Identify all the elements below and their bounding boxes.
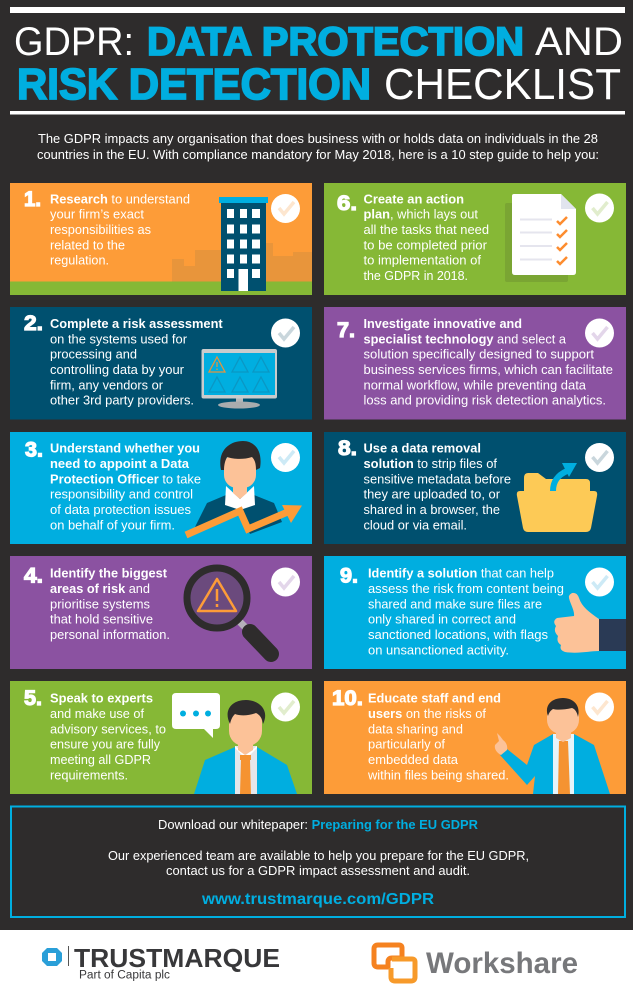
- icon: monitor with warnings: [202, 349, 277, 408]
- number: 1.: [24, 188, 41, 211]
- step text: only shared in correct and: [368, 612, 516, 627]
- icon: check: [271, 443, 300, 472]
- step text: cloud or via email.: [364, 517, 467, 532]
- panel: step 4 biggest risk: [10, 556, 312, 669]
- panel: step 8 data removal: [324, 432, 626, 544]
- step text: [50, 441, 201, 532]
- step text: particularly of: [368, 737, 445, 752]
- step text: on behalf of your firm.: [50, 517, 175, 532]
- step text: sensitive metadata before: [364, 471, 511, 486]
- illustration: city skyline: [172, 243, 312, 282]
- illustration: presenter: [495, 698, 610, 794]
- step text: of data protection issues: [50, 502, 191, 517]
- step text: embedded data: [368, 752, 459, 767]
- step text: firm, any vendors or: [50, 377, 164, 392]
- icon: checklist document: [505, 194, 576, 282]
- illustration: officer with arrow: [186, 441, 302, 535]
- title: CHECKLIST: [384, 60, 621, 109]
- step text: ensure you are fully: [50, 737, 160, 752]
- number: 8.: [338, 437, 357, 460]
- title: RISK DETECTION: [17, 60, 371, 109]
- logo: Workshare: Workshare: [426, 947, 578, 980]
- step text: [368, 566, 564, 657]
- step text: meeting all GDPR: [50, 752, 151, 767]
- step text: specialist technology and select a: [364, 331, 567, 346]
- step text: Use a data removal: [364, 441, 481, 456]
- step text: [50, 691, 166, 782]
- step text: [364, 316, 613, 408]
- step text: requirements.: [50, 767, 128, 782]
- intro text: [37, 131, 599, 162]
- panel: step 3 data protection officer: [10, 432, 312, 544]
- number: 7.: [337, 319, 355, 342]
- icon: check: [271, 318, 300, 348]
- step text: other 3rd party providers.: [50, 393, 194, 408]
- team text: Our experienced team are available to help you prepare for the EU GDPR,: [108, 848, 529, 863]
- illustration: expert: [194, 700, 297, 794]
- title: DATA PROTECTION: [147, 20, 524, 64]
- title: [14, 20, 623, 109]
- step text: users on the risks of: [368, 706, 486, 721]
- step text: responsibilities as: [50, 222, 151, 237]
- step text: [50, 566, 170, 642]
- number: 2.: [24, 312, 43, 335]
- step text: need to appoint a Data: [50, 456, 190, 471]
- step text: [367, 691, 509, 782]
- step text: on the systems used for: [50, 331, 188, 346]
- logo: Trustmarque: [42, 943, 280, 982]
- step text: to implementation of: [364, 253, 481, 268]
- panel: step 5 speak to experts: [10, 681, 312, 794]
- step text: shared in a browser, the: [364, 502, 500, 517]
- step text: shared and make sure files are: [368, 596, 542, 611]
- step text: prioritise systems: [50, 596, 150, 611]
- step text: solution specifically designed to support: [364, 347, 594, 362]
- step text: Protection Officer to take: [50, 471, 201, 486]
- step text: the GDPR in 2018.: [364, 268, 468, 283]
- step text: Identify the biggest: [50, 566, 168, 581]
- step text: Educate staff and end: [368, 691, 501, 706]
- step text: [364, 441, 511, 532]
- panel: step 10 educate staff: [324, 681, 626, 794]
- logo: Trustmarque: TRUSTMARQUE: [74, 943, 280, 973]
- title: GDPR:: [14, 20, 134, 64]
- step text: your firm’s exact: [50, 207, 144, 222]
- panel: step 9 identify a solution: [324, 556, 626, 669]
- callout: whitepaper download: [11, 806, 625, 917]
- panel: step 6 action plan: [324, 183, 626, 295]
- step text: within files being shared.: [367, 767, 509, 782]
- intro text: countries in the EU. With compliance mandatory for May 2018, here is a 10 step guide to help you:: [37, 147, 599, 162]
- icon: folder with arrow: [517, 463, 597, 532]
- number: 9.: [340, 565, 358, 588]
- step text: Research to understand: [50, 191, 190, 206]
- step text: that hold sensitive: [50, 612, 153, 627]
- step text: Understand whether you: [50, 441, 200, 456]
- number: 3.: [25, 439, 43, 462]
- panel: step 7 innovative technology: [324, 307, 626, 420]
- step text: controlling data by your: [50, 362, 185, 377]
- icon: check: [585, 692, 614, 722]
- team text: contact us for a GDPR impact assessment and audit.: [166, 863, 470, 878]
- step text: [364, 191, 489, 283]
- icon: building: [219, 197, 268, 291]
- step text: regulation.: [50, 253, 109, 268]
- step text: [50, 316, 223, 408]
- download line: Download our whitepaper: Preparing for the EU GDPR: [158, 817, 479, 832]
- step text: solution to strip files of: [364, 456, 497, 471]
- step text: sanctioned locations, with flags: [368, 627, 548, 642]
- step text: [50, 191, 190, 268]
- step text: data sharing and: [368, 721, 463, 736]
- step text: areas of risk and: [50, 581, 150, 596]
- step text: all the tasks that need: [364, 222, 489, 237]
- number: 10.: [332, 687, 363, 710]
- icon: speech bubble: [172, 693, 220, 738]
- logo: Workshare: [374, 945, 578, 981]
- icon: thumbs up: [554, 593, 626, 653]
- number: 4.: [24, 565, 43, 588]
- step text: they are uploaded to, or: [364, 487, 501, 502]
- panel: step 2 risk assessment: [10, 307, 312, 420]
- icon: check: [271, 194, 300, 223]
- icon: check: [585, 568, 614, 596]
- step text: on unsanctioned activity.: [368, 642, 509, 657]
- icon: check: [271, 692, 300, 722]
- step text: business services firms, which can facilitate: [364, 362, 613, 377]
- panel: step 1 research: [10, 183, 312, 295]
- step text: advisory services, to: [50, 721, 166, 736]
- icon: check: [585, 194, 614, 222]
- step text: and make use of: [50, 706, 144, 721]
- footer: logos: [0, 930, 633, 989]
- step text: personal information.: [50, 627, 170, 642]
- number: 6.: [337, 192, 357, 215]
- website url: www.trustmarque.com/GDPR: [201, 891, 434, 908]
- icon: check: [271, 568, 300, 596]
- logo: Trustmarque: Part of Capita plc: [79, 970, 170, 982]
- number: 5.: [24, 687, 42, 710]
- step text: Complete a risk assessment: [50, 316, 223, 331]
- step text: loss and providing risk detection analytics.: [364, 393, 606, 408]
- intro text: The GDPR impacts any organisation that does business with or holds data on individuals in the 28: [38, 131, 598, 146]
- team text: [108, 848, 529, 878]
- step text: to be completed prior: [364, 237, 488, 252]
- icon: magnifier with warning: [187, 568, 271, 654]
- step text: Speak to experts: [50, 691, 153, 706]
- step text: assess the risk from content being: [368, 581, 564, 596]
- step text: normal workflow, while preventing data: [364, 377, 587, 392]
- step text: Create an action: [364, 191, 464, 206]
- step text: Investigate innovative and: [364, 316, 522, 331]
- icon: check: [585, 318, 614, 348]
- title: AND: [535, 20, 623, 64]
- step text: Identify a solution that can help: [368, 566, 554, 581]
- icon: check: [585, 443, 614, 472]
- step text: plan, which lays out: [364, 207, 478, 222]
- step text: processing and: [50, 347, 137, 362]
- step text: responsibility and control: [50, 487, 193, 502]
- step text: related to the: [50, 237, 125, 252]
